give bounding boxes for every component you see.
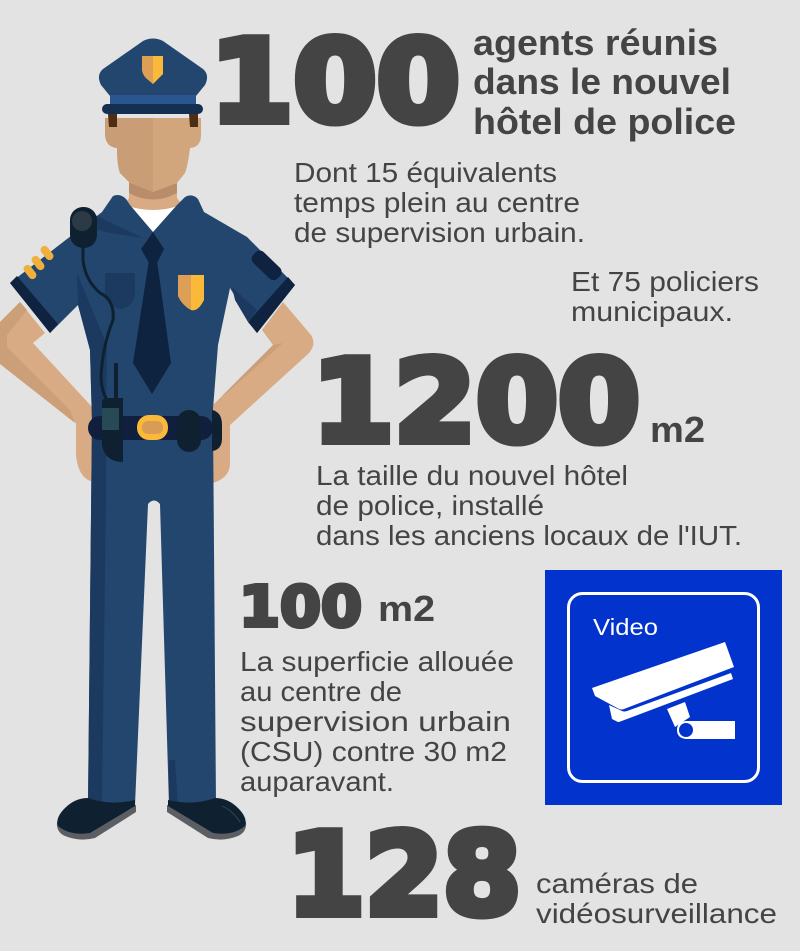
text: taille de l'hôtel de police: de police, installé (316, 490, 544, 521)
text: taille de l'hôtel de police: dans les anciens locaux de l'IUT. (316, 520, 742, 551)
panel: video surveillance sign (545, 570, 782, 805)
text: taille de l'hôtel de police (316, 460, 742, 551)
stat: 128 caméras (287, 809, 777, 941)
heading: agents réunis: dans le nouvel (473, 61, 731, 102)
police cap (99, 38, 207, 114)
icon: security camera (592, 642, 735, 739)
caption: caméras de vidéosurveillance: vidéosurveillance (536, 898, 777, 929)
text: 15 équivalents temps plein: de supervision urbain. (294, 217, 585, 248)
left arm (0, 302, 93, 482)
text: superficie du CSU (240, 646, 514, 797)
text: superficie du CSU: auparavant. (240, 766, 394, 797)
unit m2: m2 (650, 409, 705, 450)
heading: agents réunis (473, 22, 736, 142)
neck (120, 175, 186, 235)
stat: 1200 m2 (312, 336, 705, 468)
stat: 100 agents (210, 16, 736, 148)
right arm (213, 302, 313, 483)
caption: caméras de vidéosurveillance: caméras de (536, 868, 698, 899)
right shoe (167, 798, 246, 840)
text: 75 policiers municipaux: municipaux. (571, 296, 733, 327)
number 100: 100 (210, 16, 460, 148)
text: 75 policiers municipaux (571, 266, 759, 327)
stat: 100 m2 (239, 575, 435, 640)
sign label: Video (593, 614, 658, 640)
trousers (88, 420, 216, 805)
uniform shirt (10, 195, 295, 422)
caption: caméras de vidéosurveillance (536, 868, 777, 929)
radio cable and microphone (70, 207, 113, 400)
left shoe (57, 798, 136, 840)
belt (88, 363, 222, 462)
text: superficie du CSU: supervision urbain (240, 706, 511, 737)
text: 15 équivalents temps plein: temps plein au centre (294, 187, 580, 218)
number 128: 128 (287, 809, 521, 941)
heading: agents réunis: agents réunis (473, 22, 718, 63)
text: 15 équivalents temps plein: Dont 15 équivalents (294, 157, 557, 188)
chest badge (178, 275, 204, 310)
shirt: white collar (128, 206, 178, 233)
tie (133, 232, 171, 394)
head (105, 114, 201, 192)
text: superficie du CSU: La superficie allouée (240, 646, 514, 677)
text: 15 équivalents temps plein (294, 157, 585, 248)
number 1200: 1200 (312, 336, 640, 468)
text: superficie du CSU: au centre de (240, 676, 402, 707)
illustration: police officer (0, 38, 313, 840)
number 100 small: 100 (239, 575, 362, 640)
text: taille de l'hôtel de police: La taille du nouvel hôtel (316, 460, 628, 491)
text: superficie du CSU: (CSU) contre 30 m2 (240, 736, 507, 767)
sleeve stripes (22, 244, 55, 281)
heading: agents réunis: hôtel de police (473, 101, 736, 142)
unit m2: m2 (378, 588, 435, 629)
text: 75 policiers municipaux: Et 75 policiers (571, 266, 759, 297)
